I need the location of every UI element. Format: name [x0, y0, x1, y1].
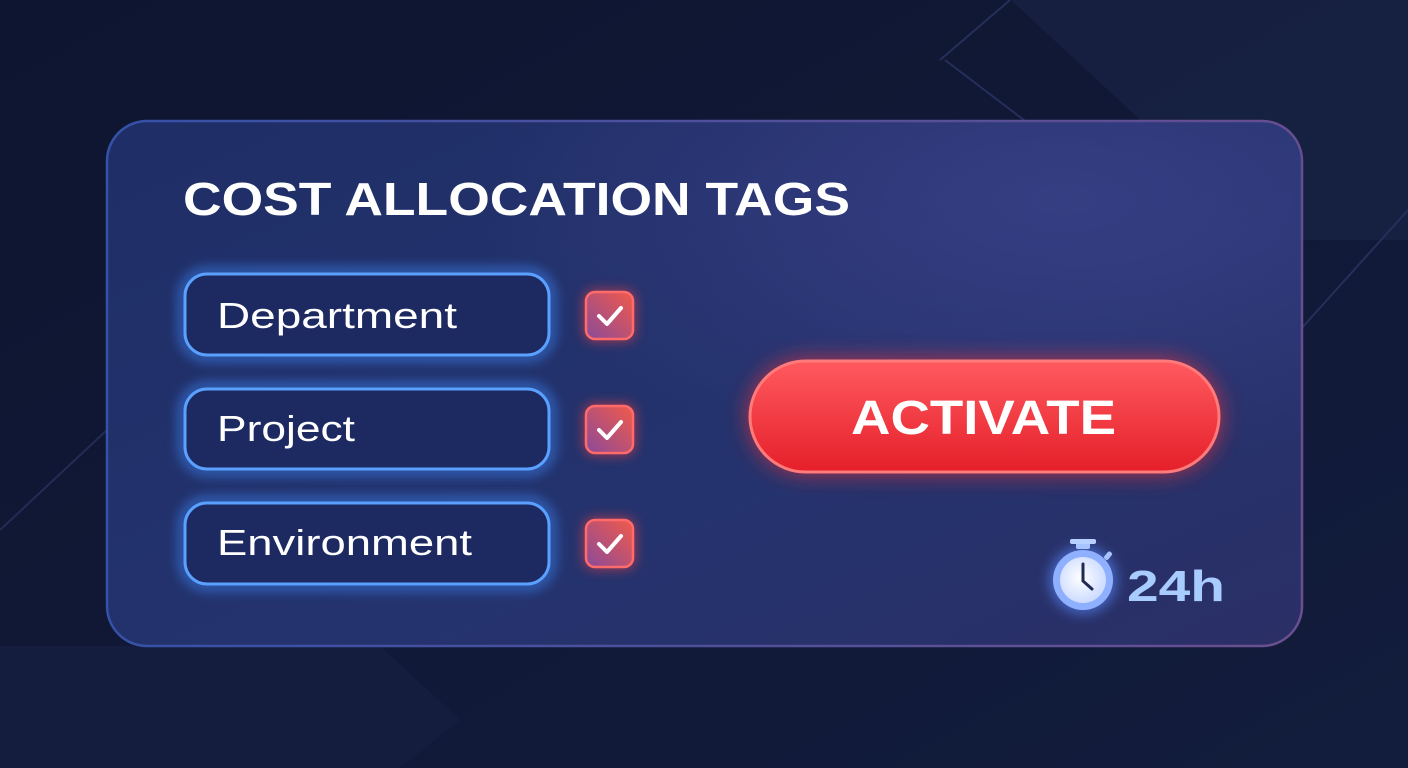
tag: Department: Department [217, 295, 457, 336]
checkbox 1 [584, 290, 635, 341]
tag: Department [183, 272, 551, 357]
title: COST ALLOCATION TAGS [183, 173, 850, 225]
tag: Project [183, 387, 551, 471]
button: ACTIVATE [750, 361, 1219, 472]
tag: Project: Project [217, 408, 355, 449]
tag: Environment [183, 501, 551, 586]
checkbox 2 [584, 404, 635, 455]
label: 24h: 24h [1127, 562, 1225, 611]
button: ACTIVATE: ACTIVATE [851, 392, 1116, 445]
tag: Environment: Environment [217, 522, 472, 563]
panel: main card [107, 121, 1302, 646]
checkbox 3 [584, 518, 635, 569]
icon: stopwatch [1049, 539, 1117, 614]
